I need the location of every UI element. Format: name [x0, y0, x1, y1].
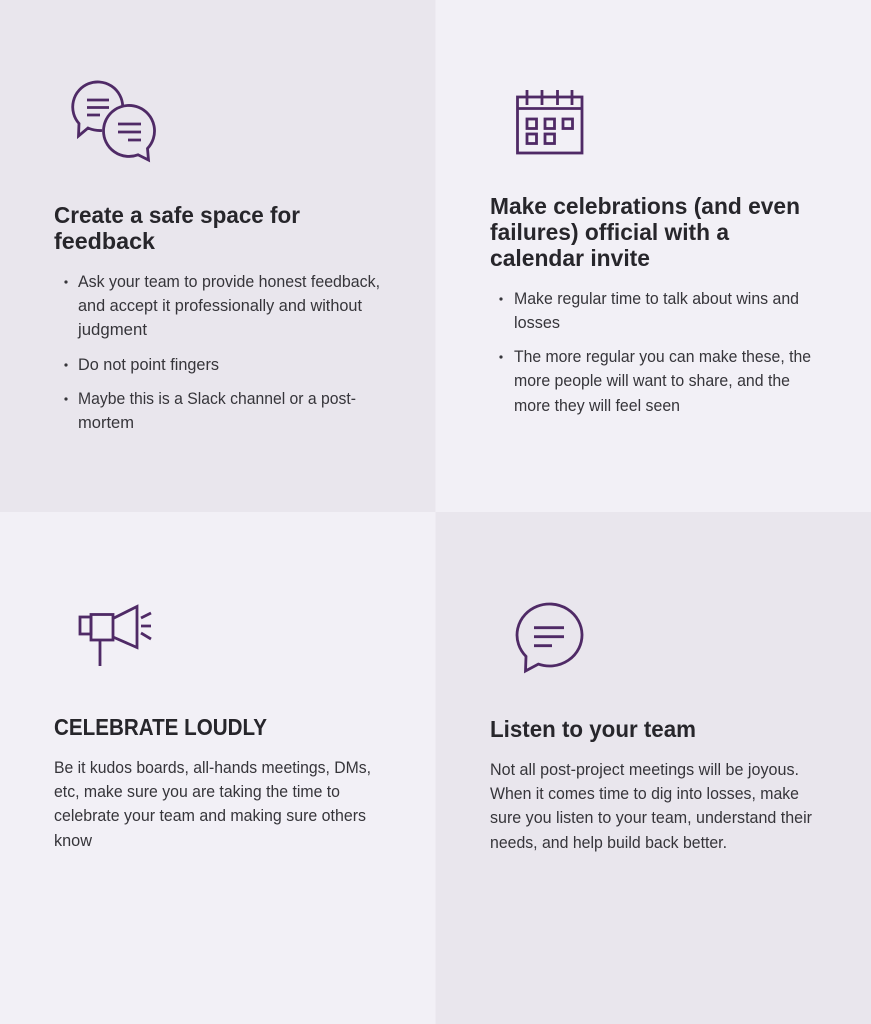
text block: celebrate loudly: know [54, 832, 92, 850]
panel: create a safe space for feedback [0, 0, 436, 512]
text block: listen to your team: needs, and help build back better. [490, 834, 727, 852]
heading: make celebrations official [490, 193, 800, 271]
heading: celebrate loudly: CELEBRATE LOUDLY [54, 714, 267, 740]
text block: celebrate loudly [54, 759, 371, 850]
icon: megaphone [80, 606, 151, 666]
list: feedback tips: judgment [77, 321, 147, 339]
icon: speech bubble [517, 604, 582, 671]
list: feedback tips: mortem [78, 414, 134, 432]
text block: listen to your team [490, 761, 812, 852]
text block: listen to your team: sure you listen to your team, understand their [490, 809, 812, 827]
text block: celebrate loudly: Be it kudos boards, all-hands meetings, DMs, [54, 759, 371, 777]
icon: two speech bubbles [73, 82, 155, 160]
text block: listen to your team: Not all post-project meetings will be joyous. [490, 761, 799, 779]
heading: create a safe space: Create a safe space for [54, 202, 300, 228]
text block: celebrate loudly: celebrate your team and making sure others [54, 807, 366, 825]
list: celebration tips: more they will feel seen [514, 397, 680, 415]
list: celebration tips: more people will want to share, and the [514, 372, 790, 390]
panel: listen to your team [436, 512, 871, 1024]
text block: celebrate loudly: etc, make sure you are taking the time to [54, 783, 340, 801]
list: feedback tips: and accept it professionally and without [78, 297, 362, 315]
heading: create a safe space [54, 202, 300, 254]
list: feedback tips: Maybe this is a Slack channel or a post- [78, 390, 356, 408]
icon: calendar [518, 90, 582, 153]
heading: make celebrations official: failures) official with a [490, 219, 730, 245]
list: feedback tips: Ask your team to provide honest feedback, [78, 273, 380, 291]
heading: make celebrations official: calendar invite [490, 245, 650, 271]
list: celebration tips [499, 290, 811, 415]
text block: listen to your team: When it comes time to dig into losses, make [490, 785, 799, 803]
heading: listen to your team: Listen to your team [490, 716, 696, 742]
panel: make celebrations official [436, 0, 871, 512]
panel: celebrate loudly [0, 512, 436, 1024]
heading: create a safe space: feedback [54, 228, 156, 254]
list: feedback tips [64, 273, 380, 432]
list: celebration tips: The more regular you can make these, the [514, 348, 811, 366]
list: celebration tips: Make regular time to talk about wins and [514, 290, 799, 308]
list: celebration tips: losses [514, 314, 560, 332]
list: feedback tips: Do not point fingers [78, 356, 219, 374]
heading: make celebrations official: Make celebrations (and even [490, 193, 800, 219]
